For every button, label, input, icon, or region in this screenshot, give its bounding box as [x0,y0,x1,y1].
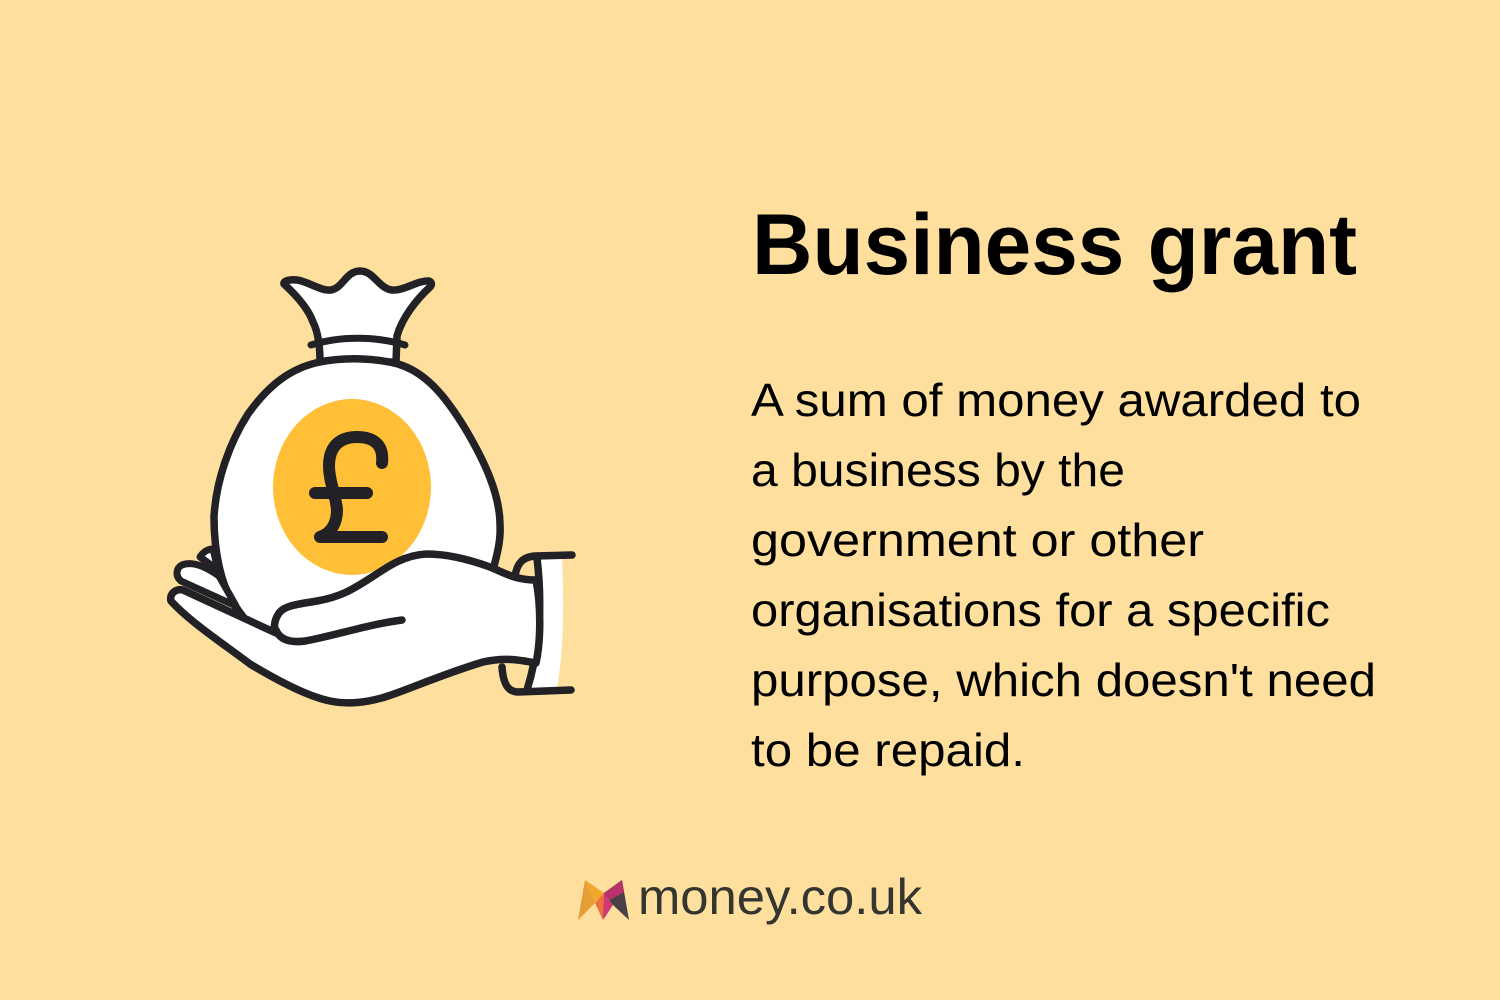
title: Business grant [752,197,1357,293]
definition text block: government or other [751,514,1204,566]
far finger [200,549,218,570]
logo wordmark: money.co.uk [638,869,923,925]
bag body [214,359,500,640]
coin [273,399,431,575]
definition text block: organisations for a specific [751,584,1330,636]
hand [171,554,540,703]
middle finger [177,564,236,606]
cuff edges [502,555,572,692]
definition text block: to be repaid. [751,724,1025,776]
icon: hand holding money bag [171,271,572,703]
definition text block: A sum of money awarded to [751,374,1361,426]
definition text block [751,374,1376,776]
thumb line [276,620,402,642]
icon: M mark [578,880,629,920]
definition text block: a business by the [751,444,1125,496]
bag tie [311,338,405,345]
definition text block: purpose, which doesn't need [751,654,1376,706]
cuff fill [528,558,563,691]
logo: money.co.uk [578,869,923,925]
bag neck and top [284,271,431,362]
pound sign [315,437,382,537]
